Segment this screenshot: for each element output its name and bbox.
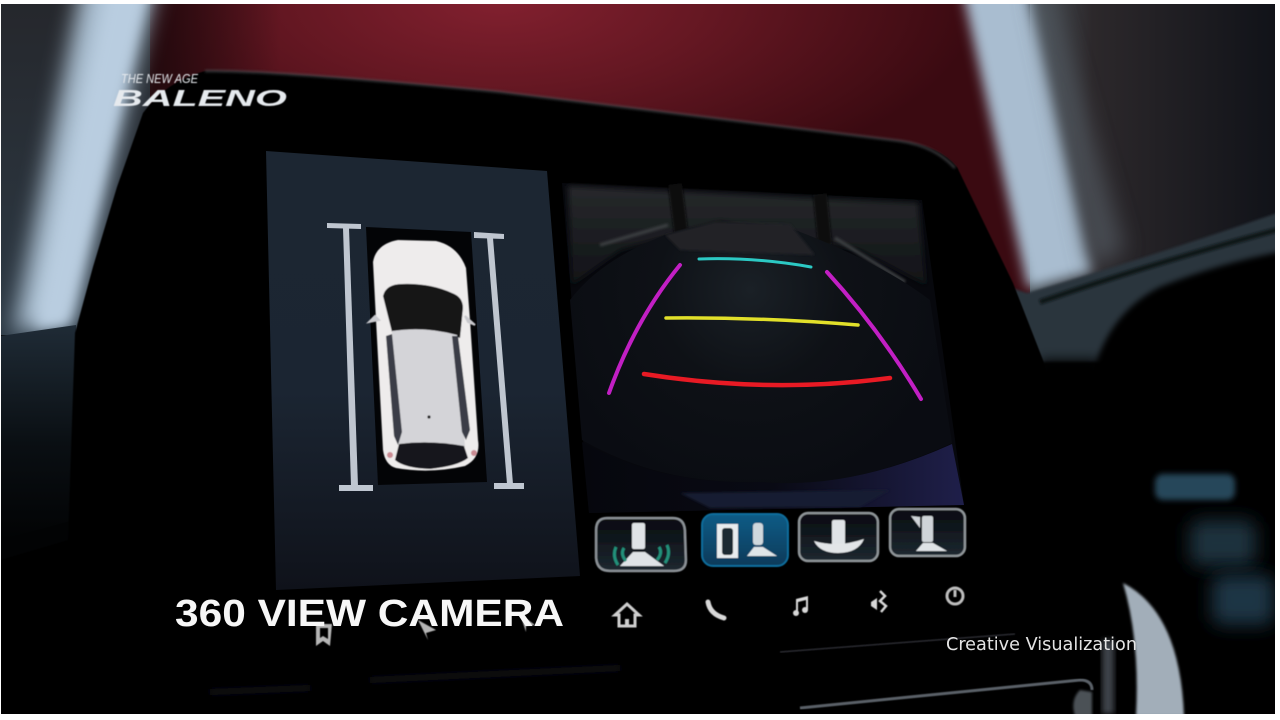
button: wide rear view: [799, 513, 878, 561]
panel: rear camera view: [562, 183, 964, 513]
icon: music note: [793, 596, 808, 616]
bottom trim vent: [210, 634, 1092, 716]
button: sensors: [596, 518, 686, 571]
icon: power: [947, 588, 963, 604]
title: 360 VIEW CAMERA: [175, 593, 564, 635]
icon: voice: [871, 591, 886, 612]
button: selected split view: [702, 514, 788, 566]
left parking line: [327, 223, 373, 491]
logo: The New Age Baleno: BALENO: [113, 85, 287, 111]
camera mode buttons: [596, 509, 965, 571]
parking slot: [366, 227, 487, 485]
icon: phone: [708, 602, 724, 618]
icon: home: [615, 604, 639, 626]
logo: The New Age Baleno: THE NEW AGE: [121, 72, 199, 86]
panel: top-down parking view: [266, 151, 580, 590]
logo: The New Age Baleno: [113, 72, 287, 111]
car top view: [369, 240, 478, 471]
guide lines: [609, 259, 921, 399]
floor: [570, 223, 952, 483]
faded icons under caption: [316, 614, 535, 646]
under-bumper band: [582, 442, 964, 513]
right parking line: [474, 232, 524, 489]
disclaimer caption: Creative Visualization: [946, 635, 1137, 655]
button: corner view: [890, 509, 965, 556]
garage walls: [568, 186, 926, 285]
system icons row: [316, 588, 963, 646]
infotainment bezel: [0, 71, 1100, 716]
